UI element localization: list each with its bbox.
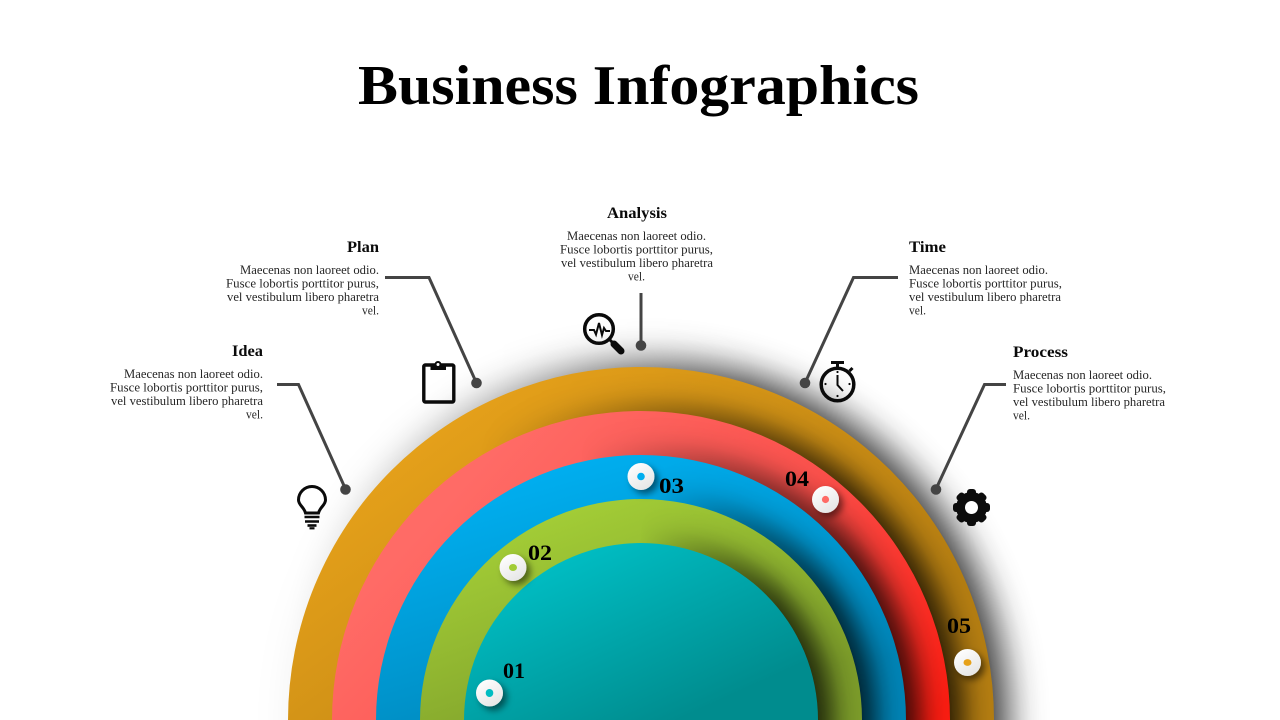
text block: plan: vel. [362,303,379,318]
icon: gear [953,489,990,526]
number 04: 04 [785,466,809,491]
ring: orange [288,367,994,720]
text block: analysis [560,205,713,284]
text block: time: Maecenas non laoreet odio. [909,262,1048,277]
text block: process: vel vestibulum libero pharetra [1013,394,1165,409]
text block: time: Fusce lobortis porttitor purus, [909,276,1062,291]
text block: idea: Idea [232,343,263,360]
text block: plan: Maecenas non laoreet odio. [240,262,379,277]
text block: plan [226,239,379,318]
icon: stopwatch [821,362,854,401]
text block: process: Fusce lobortis porttitor purus, [1013,381,1166,396]
marker 01 [476,680,503,706]
ring: green [420,499,862,720]
number 02: 02 [528,540,552,565]
connector: process [931,384,1006,495]
number 01: 01 [503,658,525,683]
title: Business Infographics [358,55,919,117]
connector: idea [277,384,351,495]
text block: plan: Fusce lobortis porttitor purus, [226,276,379,291]
text block: time: Time [909,239,946,256]
marker 03 [628,463,654,490]
marker 04 [812,486,839,513]
semicircle chart [288,333,1037,720]
text block: idea [110,343,263,422]
text block: analysis: vel vestibulum libero pharetra [561,255,713,270]
ring shadow: teal [650,526,852,720]
ring shadow: green [662,484,897,720]
text block: time: vel. [909,303,926,318]
text block: process: Maecenas non laoreet odio. [1013,367,1152,382]
icon: clipboard [424,361,454,402]
text block: plan: vel vestibulum libero pharetra [227,289,379,304]
text block: analysis: Analysis [607,205,667,222]
marker 02 [500,554,526,581]
connector: analysis [636,293,646,351]
number 03: 03 [659,473,684,498]
text block: time [909,239,1062,318]
icon: magnifier with pulse [585,315,621,351]
text block: process: Process [1013,344,1068,361]
text block: idea: vel vestibulum libero pharetra [111,393,263,408]
connector: plan [385,278,482,388]
core: teal [464,543,818,720]
number 05: 05 [947,613,971,638]
ring shadow: red [510,388,985,720]
ring: red [332,411,950,720]
text block: process [1013,344,1166,423]
text block: analysis: Maecenas non laoreet odio. [567,228,706,243]
text block: process: vel. [1013,408,1030,423]
marker 05 [954,649,981,676]
icon: light bulb [298,486,326,528]
text block: analysis: Fusce lobortis porttitor purus, [560,242,713,257]
text block: idea: vel. [246,407,263,422]
text block: plan: Plan [347,239,379,256]
ring: blue [376,455,906,720]
text block: analysis: vel. [628,269,645,284]
text block: idea: Fusce lobortis porttitor purus, [110,380,263,395]
text block: idea: Maecenas non laoreet odio. [124,366,263,381]
connector: time [800,278,898,388]
text block: time: vel vestibulum libero pharetra [909,289,1061,304]
ring shadow: blue [599,434,943,720]
ring shadow: orange [300,333,1037,720]
